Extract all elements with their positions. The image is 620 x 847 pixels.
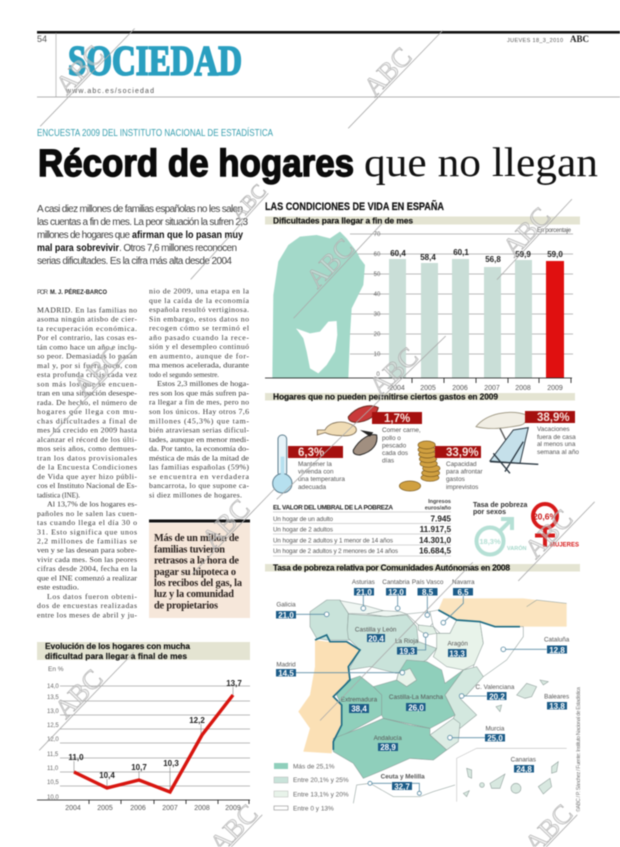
year labels: 2004 [389,385,405,392]
icon: female symbol: 20,6% [533,512,557,522]
region values: 19,3 [399,647,415,656]
region values: 13,3 [449,650,465,658]
article column 2: se encuentra en verdadera [149,472,250,481]
map of Spain [298,598,567,803]
callout: los recibos del gas, la [154,578,242,589]
watermarks: ABC [363,341,424,401]
article column 1: esta profunda crisis cada vez [37,370,138,379]
article column 1: tran los datos provisionales [37,453,137,462]
y axis labels: 12,5 [47,723,59,729]
icon: male symbol: VARÓN [507,544,526,552]
stat: meat 1,7%: 1,7% [384,413,410,425]
region values: 13,8 [549,702,565,711]
article column 1: de la Encuesta Condiciones [37,463,137,472]
region labels: Madrid [276,661,296,668]
page number: 54 [37,34,47,44]
region labels: Extremadura [341,697,378,704]
region labels: C. Valenciana [476,684,515,691]
axis labels: 10 [374,352,381,358]
watermarks: ABC [67,341,127,402]
article column 2: da. Por tanto, la economía do- [149,444,249,453]
region labels: País Vasco [412,579,444,586]
watermarks: ABC [518,503,579,564]
article column 2: ma menos acelerada, durante [149,361,250,370]
section title: SOCIEDAD [68,39,242,85]
poverty by sex: por sexos [473,509,506,516]
stat: meat 1,7%: pescado [382,442,407,450]
article column 1: 2,2 millones de familias se [37,536,138,546]
kicker: ENCUESTA 2009 DEL INSTITUTO NACIONAL DE ESTADÍSTICA [37,126,273,139]
y axis labels: 14,0 [47,684,59,690]
map legend [274,763,349,812]
byline: M. J. PÉREZ-BARCO [50,287,107,296]
y axis labels [47,666,64,801]
article column 2: bién atraviesan serias dificul- [149,426,249,435]
map legend: Entre 20,1% y 25% [293,777,349,784]
data values: 11,0 [68,753,84,762]
axis labels: 40 [374,292,381,298]
article column 1: dos de encuestas realizadas [37,601,137,610]
data values: 10,4 [99,771,115,780]
map leaders [296,595,547,795]
data values [68,679,242,780]
region labels: Galicia [276,601,296,608]
table: poverty threshold: 7.945 [430,514,451,524]
article column 1: mal y, por si fuera poco, con [37,361,137,370]
article column 2: tades, aunque en menor medi- [149,435,249,444]
data values: 10,3 [163,759,179,768]
morocco coast [353,783,455,803]
y axis labels: 10,5 [47,780,59,786]
table: poverty threshold: 14.301,0 [419,536,451,545]
table: poverty threshold: 16.684,5 [419,546,451,556]
intro text [37,204,248,267]
canaries frame [457,748,567,802]
watermarks: ABC [497,201,556,262]
x axis labels: 2009 [225,805,241,812]
stat: holidays 38,9%: 38,9% [537,412,570,424]
article column 1: Los datos fueron obteni- [47,592,137,601]
bar values: 56,8 [485,255,501,264]
newspaper mark: ABC [570,34,589,44]
article column 1: pañoles no le salen las cuen- [37,509,137,518]
table: poverty threshold: 11.917,5 [420,525,451,534]
axis labels: 20 [374,332,381,338]
region labels: Asturias [352,579,375,586]
bar values: 58,4 [420,253,436,262]
article column 1: tadística (INE). [37,490,80,499]
icon: fish [353,430,377,455]
axis labels [374,232,381,378]
article column 1: Por el contrario, las cosas es- [37,333,137,342]
region labels: Castilla y León [355,626,397,633]
article column 2: que la caída de la economía [149,296,250,305]
y axis labels: 13,0 [47,709,59,715]
watermarks: ABC [48,663,109,724]
callout: de propietarios [154,600,218,612]
article column 2: son los únicos. Hay otros 7,6 [149,407,249,416]
region values: 6,5 [457,588,469,597]
islands [463,680,558,797]
icon: meat [348,406,378,422]
callout: retrasos a la hora de [154,556,239,566]
icon: chicken [317,422,356,436]
axis labels: 50 [374,272,381,278]
poverty by sex: Tasa de pobreza [473,502,527,509]
article column 2: sión y el desempleo continuó [149,342,249,351]
region values: 24,8 [516,765,532,774]
stat: meat 1,7% [372,412,422,464]
region labels: Ceuta y Melilla [381,773,425,780]
watermarks: ABC [227,180,271,225]
panel: unaffordable expenses [265,392,579,493]
article column 1: vivir cada mes. Son las peores [37,555,137,564]
icons group [273,406,538,493]
region values: 25,0 [487,734,503,743]
stat: unexpected expenses 33,9%: imprevistos [446,484,478,491]
article column 1: rada. De hecho, el número de [37,398,138,407]
region values: 20,4 [368,634,384,644]
icon: male symbol [476,519,526,554]
watermarks: ABC [357,41,418,102]
stat: unexpected expenses 33,9% [435,446,483,491]
article column 1 [37,306,138,619]
date: JUEVES 18_3_2010 [507,38,563,44]
axis labels: 70 [374,232,381,238]
article column 1: tran en una situación desespe- [37,389,137,398]
axis labels: 0 [376,372,380,378]
article column 2: las familias españolas (59%) [149,463,249,472]
stat: heating 6,3% [288,446,345,491]
x axis labels: 2007 [162,805,178,812]
stat: heating 6,3%: adecuada [298,484,327,491]
watermarks: ABC [195,493,256,554]
article column 1: alcanzar el récord de los últi- [37,435,137,444]
article column 2: en aumento, aunque de for- [149,351,249,360]
region labels: Cantabria [382,579,410,586]
data values: 12,2 [189,716,205,725]
article column 1: 31. Esto significa que unos [37,527,137,536]
region values: 14,5 [278,669,294,678]
intro text: las cuentas a fin de mes. La peor situación la sufren 2,3 [37,217,248,228]
region values: 12,0 [388,588,404,597]
table: poverty threshold: Un hogar de un adulto [273,516,334,523]
stat: holidays 38,9%: semana al año [537,449,579,456]
intro text: afirman que lo pasan muy [132,230,243,241]
byline: POR [37,289,48,296]
article column 1: mes ha crecido en 2009 hasta [37,426,138,435]
chart heading: dificultad para llegar a final de mes [45,651,187,661]
chart heading [265,216,580,226]
section url: www.abc.es/sociedad [65,88,154,95]
region labels: Baleares [544,693,569,700]
article column 1: que el INE comenzó a realizar [37,574,137,582]
stat: meat 1,7%: cada dos [382,450,408,457]
year labels: 2006 [452,385,468,392]
region labels: Canarias [511,757,536,764]
article column 1: cifras desde 2004, fecha en la [37,564,138,573]
decorative map silhouette [272,232,365,378]
y axis labels: 10,0 [47,795,59,801]
article column 2: millones (45,3%) que tam- [149,416,249,425]
region labels: Cataluña [544,637,570,644]
article column 1: ta recuperación económica. [37,324,137,333]
article column 1: este estudio. [37,583,79,592]
unit label: En porcentaje [537,228,572,234]
region values: 32,7 [394,782,410,792]
chart heading: Evolución de los hogares con mucha [45,641,190,651]
watermarks: ABC [300,233,360,294]
x axis labels [65,805,241,812]
intro text: . Otros 7,6 millones reconocen [119,243,237,254]
table: poverty threshold: Ingresos [428,499,451,505]
region values: 12,8 [549,646,565,655]
region values: 38,4 [351,704,367,714]
region labels [276,579,570,780]
panel heading: Hogares que no pueden permitirse ciertos gastos en 2009 [273,392,498,402]
bar values: 59,9 [515,250,531,259]
poverty by sex [473,502,579,554]
map panel: relative poverty by region [265,562,580,812]
article column 2: año pasado cuando la rece- [149,333,249,342]
article column 1: tán como hace un año e inclu- [37,342,137,352]
region values: 8,5 [422,588,434,597]
stat: heating 6,3%: vivienda con [298,468,334,476]
stat: holidays 38,9%: fuera de casa [537,434,576,441]
year labels [389,385,563,392]
intro text: millones de hogares que [37,230,130,241]
article column 2: todo el segundo semestre. [149,370,219,379]
year labels: 2008 [515,385,531,392]
article column 2: si diez millones de hogares. [149,490,242,499]
byline [37,287,107,296]
intro text: serias dificultades. Es la cifra más alta desde 2004 [37,256,232,267]
callout: pagar su hipoteca o [154,567,236,578]
y axis labels: En % [48,666,64,673]
panel heading: Tasa de pobreza relativa por Comunidades Autónomas en 2008 [273,562,510,572]
stat: heating 6,3%: una temperatura [298,476,345,483]
article column 2: Estos 2,3 millones de hoga- [157,379,249,388]
line chart: evolution of households [37,641,250,812]
bars [389,259,532,378]
article column 2: bancarrota, lo que supone ca- [149,481,249,490]
credit: ©ABC / P. Sánchez / Fuente: Instituto Nacional de Estadística [575,687,582,812]
map legend: Entre 13,1% y 20% [293,792,349,798]
stat: holidays 38,9%: al menos una [537,441,576,448]
chart heading [37,641,250,661]
x axis labels: 2004 [65,805,81,812]
region labels: Murcia [485,726,505,733]
headline [38,139,598,185]
year labels: 2005 [420,385,436,392]
watermarks: ABC [49,39,110,100]
data values: 10,7 [131,763,147,772]
infographic title: LAS CONDICIONES DE VIDA EN ESPAÑA [265,200,444,213]
y axis labels: 13,5 [47,695,59,701]
icon: coins [399,441,440,491]
article column 1: asoma ningún atisbo de cier- [37,315,137,324]
region labels: Andalucía [374,735,402,742]
table: poverty threshold: Un hogar de 2 adultos y 2 menores de 14 años [273,548,398,555]
table: poverty threshold [273,499,452,556]
bar values: 60,4 [390,249,406,258]
stat: holidays 38,9% [525,411,579,456]
bar values [390,248,563,264]
article column 1: tas cuando llega el día 30 o [37,518,137,527]
icon: male symbol: 18,3% [479,537,501,546]
icon: female symbol [533,504,579,548]
table: poverty threshold: euros/año [425,506,452,512]
bar values: 60,1 [453,248,469,257]
region values: 26,0 [408,704,424,712]
stat: heating 6,3%: 6,3% [298,447,324,459]
article column 1: cos el Instituto Nacional de Es- [37,481,137,490]
region labels: Aragón [447,641,468,648]
headline: Récord de hogares [38,143,354,185]
map legend: Entre 0 y 13% [293,806,334,812]
table: poverty threshold: Un hogar de 2 adultos [273,526,333,534]
icon: thermometer [273,435,292,493]
page header [37,31,620,97]
axis labels: 60 [374,252,381,258]
stat: holidays 38,9%: Vacaciones [537,426,570,433]
article column 1: son más los que se encuen- [37,379,137,388]
callout [149,520,250,618]
article column 1: so peor. Demasiadas lo pasan [37,352,137,361]
chart heading: Dificultades para llegar a fin de mes [273,216,413,226]
stat: heating 6,3%: Mantener la [298,461,332,468]
table: poverty threshold: Un hogar de 2 adultos y 1 menor de 14 años [273,538,393,544]
region labels: Castilla-La Mancha [389,694,444,701]
callout: luz y la comunidad [154,589,234,600]
article column 2: méstica de más de la mitad de [149,453,250,462]
y axis labels: 12,0 [47,737,59,743]
article column 2: nio de 2009, una etapa en la [149,286,250,296]
intro text: mal para sobrevivir [37,243,119,254]
stat: meat 1,7%: pollo o [382,435,401,442]
article column 2: ra llegar a fin de mes, pero no [149,398,249,407]
data values: 13,7 [226,679,242,688]
table: poverty threshold: EL VALOR DEL UMBRAL DE LA POBREZA [273,504,393,512]
article column 1: Al 13,7% de los hogares es- [47,500,137,508]
article column 1: MADRID. En las familias no [37,306,137,314]
region values: 20,2 [489,692,505,702]
y axis labels: 11,0 [47,766,59,772]
stat: meat 1,7%: días [382,458,394,464]
article column 1: de Vida que ayer hizo públi- [37,472,137,481]
x axis labels: 2008 [194,805,210,812]
x axis labels: 2006 [130,805,146,812]
stat: unexpected expenses 33,9%: Capacidad [446,461,477,468]
region labels: Navarra [452,579,475,586]
article column 2: res son los que más sufren pa- [149,388,249,398]
article column 2: española resultó vertiginosa. [149,305,249,314]
stat: unexpected expenses 33,9%: gastos [446,476,465,483]
callout: familias tuvieron [154,544,225,556]
headline: que no llegan [364,139,598,185]
region labels: La Rioja [395,638,419,645]
article column 2: recogen cómo se terminó el [149,324,250,333]
article column 2 [149,286,250,499]
article column 1: mos seis años, como demues- [37,444,137,453]
region values: 21,0 [356,588,372,597]
bar values: 59,0 [547,250,563,259]
year labels: 2009 [547,385,563,392]
region values: 21,0 [278,611,294,620]
article column 1: chas dificultades a final de [37,416,138,425]
region values [276,588,567,792]
article column 1: entre los meses de abril y ju- [37,610,137,619]
year labels: 2007 [484,385,500,392]
icon: female symbol: MUJERES [550,542,579,548]
region values: 28,9 [380,743,396,752]
stat: unexpected expenses 33,9%: 33,9% [446,447,479,459]
bar chart: difficulty reaching end of month [265,216,580,392]
data line [74,695,233,792]
y axis labels: 11,5 [47,752,59,758]
icon: beach umbrella and deck chair [476,412,538,473]
callout: Más de un millón de [154,533,239,544]
stat: unexpected expenses 33,9%: para afrontar [446,468,483,476]
highlighted bar 2009 [546,261,564,378]
x axis labels: 2005 [97,805,113,812]
axis labels: 30 [374,312,381,318]
map legend: Más de 25,1% [293,764,335,770]
intro text: A casi diez millones de familias españolas no les salen [37,204,243,215]
article column 1: ven y se las desean para sobre- [37,546,137,555]
article column 1: hogares que llega con mu- [37,407,137,416]
article column 2: Sin embargo, estos datos no [149,314,249,323]
stat: meat 1,7%: Comer carne, [382,427,421,434]
